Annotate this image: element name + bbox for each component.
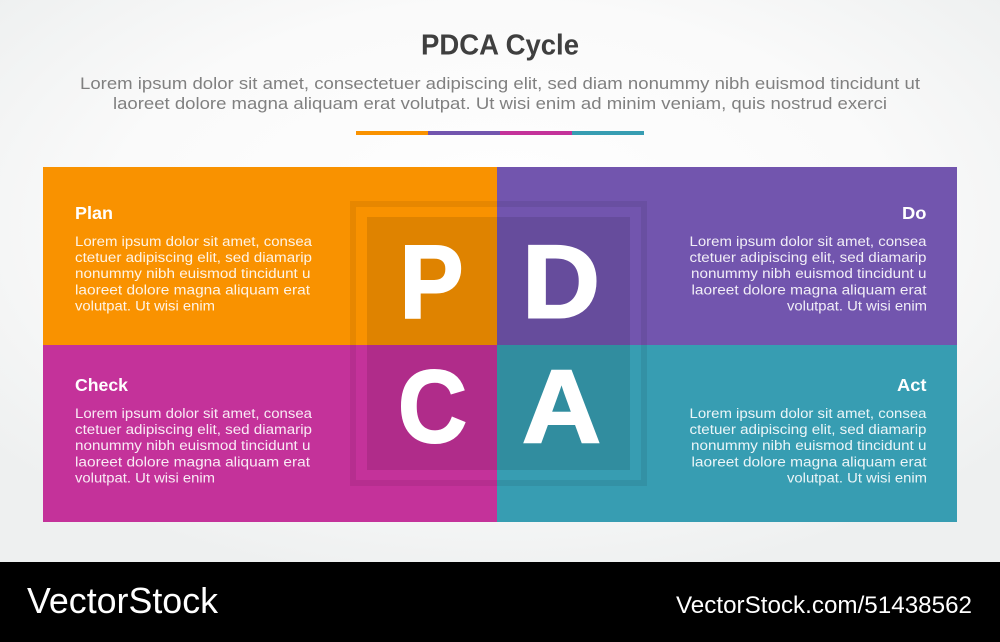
text block: plan: volutpat. Ut wisi enim <box>75 298 215 314</box>
centre square <box>367 217 630 470</box>
text block: check: nonummy nibh euismod tincidunt u <box>75 438 310 453</box>
text block: do: Lorem ipsum dolor sit amet, consea <box>690 234 927 249</box>
panel: check <box>43 345 497 522</box>
subtitle text: Lorem ipsum dolor sit amet, consectetuer adipiscing elit, sed diam nonummy nibh euismod tincidunt ut <box>80 74 920 93</box>
text block: do: nonummy nibh euismod tincidunt u <box>691 266 926 281</box>
heading: do: Do <box>902 203 926 223</box>
letter D: D <box>522 224 600 340</box>
heading: check: Check <box>75 375 128 395</box>
text block: do: laoreet dolore magna aliquam erat <box>692 282 927 298</box>
panel: do <box>497 167 957 345</box>
title: PDCA Cycle <box>421 30 579 62</box>
text block: act: nonummy nibh euismod tincidunt u <box>691 438 926 453</box>
text block: plan <box>75 234 313 314</box>
text block: check: Lorem ipsum dolor sit amet, consea <box>75 406 313 421</box>
text block: act: ctetuer adipiscing elit, sed diamarip <box>690 422 926 437</box>
colour divider bar <box>356 131 644 135</box>
heading: plan: Plan <box>75 203 113 223</box>
text block: do <box>690 234 927 314</box>
text block: plan: laoreet dolore magna aliquam erat <box>75 282 310 298</box>
letter C: C <box>398 349 467 464</box>
panel: act <box>497 345 957 522</box>
text block: check <box>75 406 313 486</box>
footer url: VectorStock.com/51438562 <box>676 592 972 619</box>
subtitle text <box>80 74 920 113</box>
text block: plan: ctetuer adipiscing elit, sed diamarip <box>75 250 312 265</box>
heading: act: Act <box>897 375 927 395</box>
footer bar <box>0 562 1000 642</box>
text block: plan: nonummy nibh euismod tincidunt u <box>75 266 310 281</box>
text block: act: Lorem ipsum dolor sit amet, consea <box>690 406 927 421</box>
centre square frame <box>353 204 644 483</box>
text block: check: laoreet dolore magna aliquam erat <box>75 454 310 470</box>
text block: act: volutpat. Ut wisi enim <box>787 470 927 486</box>
footer logo: VectorStock <box>27 580 219 621</box>
text block: check: ctetuer adipiscing elit, sed diamarip <box>75 422 312 437</box>
letter P: P <box>400 224 464 340</box>
text block: do: volutpat. Ut wisi enim <box>787 298 927 314</box>
panel: plan <box>43 167 497 345</box>
text block: act: laoreet dolore magna aliquam erat <box>692 454 927 470</box>
text block: act <box>690 406 927 486</box>
text block: check: volutpat. Ut wisi enim <box>75 470 215 486</box>
text block: plan: Lorem ipsum dolor sit amet, consea <box>75 234 313 249</box>
text block: do: ctetuer adipiscing elit, sed diamarip <box>690 250 926 265</box>
subtitle text: laoreet dolore magna aliquam erat volutpat. Ut wisi enim ad minim veniam, quis nostrud exerci <box>113 94 887 113</box>
letter A: A <box>522 350 601 466</box>
